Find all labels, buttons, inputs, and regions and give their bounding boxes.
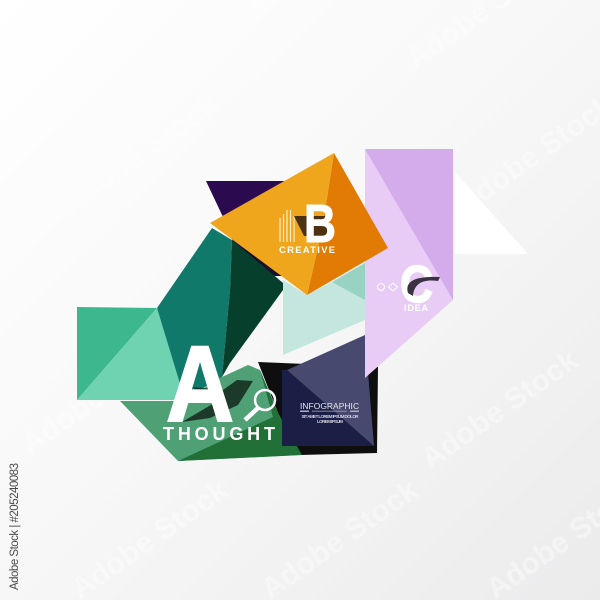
label CREATIVE: CREATIVE [279, 245, 335, 256]
body text [302, 414, 359, 424]
letter B: B [304, 194, 336, 254]
panel: orange B creative [210, 153, 388, 295]
label IDEA: IDEA [404, 303, 428, 313]
icon: magnifier [245, 390, 275, 420]
light green triangle [77, 308, 185, 400]
panel: A thought [77, 228, 378, 461]
panel: lilac C idea [365, 149, 453, 378]
black square [258, 362, 378, 455]
body text: LOREM IPSUM [317, 419, 343, 424]
icon: vertical lines [280, 210, 294, 242]
label THOUGHT: THOUGHT [163, 424, 275, 444]
letter C: C [400, 256, 433, 314]
body text: SIT AMET LOREM IPSUM DOLOR [302, 414, 359, 419]
infographic: Adobe Stock [415, 343, 584, 476]
letter shadow [182, 380, 253, 422]
letter shadow [294, 216, 328, 236]
label INFOGRAPHIC: INFOGRAPHIC [300, 401, 359, 411]
panel: dark purple triangle [206, 181, 284, 276]
panel: light teal shape [283, 263, 365, 355]
left green square [77, 307, 157, 400]
letter A: A [166, 323, 234, 444]
bottom green shape [120, 365, 302, 461]
swoosh shadow [407, 277, 440, 296]
dark teal folds [157, 228, 283, 400]
infographic: Adobe Stock [55, 88, 224, 221]
infographic: Adobe Stock [15, 328, 184, 461]
watermark id: Adobe Stock | #205240083 [9, 463, 21, 590]
icon: circle and diamond [378, 283, 398, 291]
white triangle [455, 172, 528, 254]
divider bars [300, 410, 359, 412]
panel: navy infographic square [282, 335, 374, 446]
